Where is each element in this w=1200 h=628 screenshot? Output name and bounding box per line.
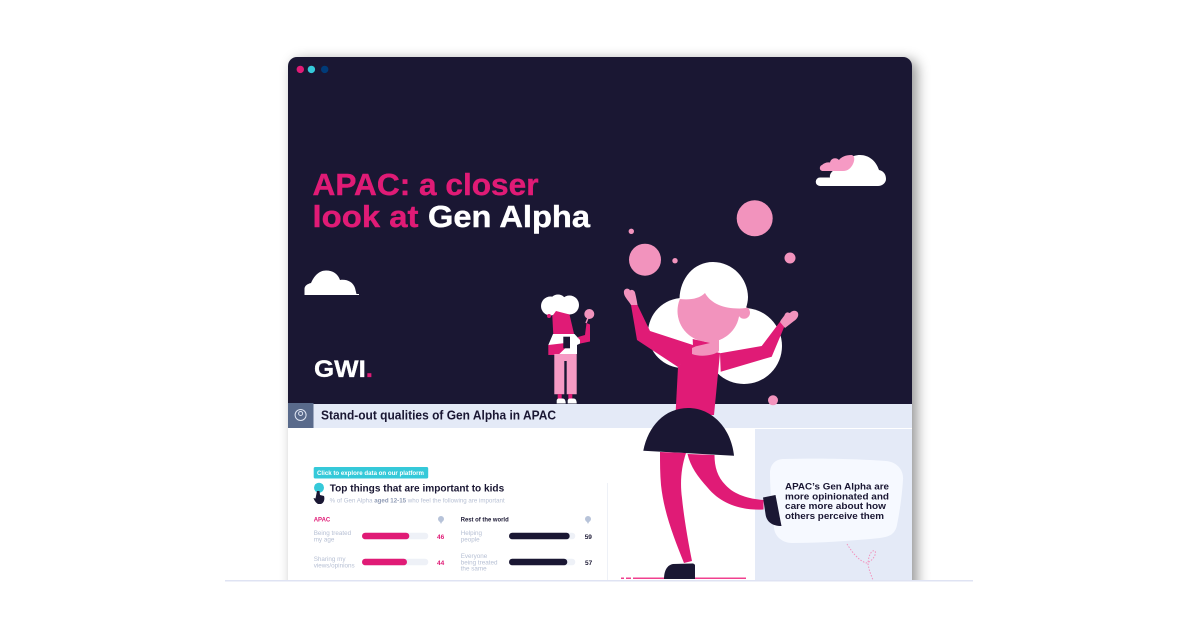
- left hand: [624, 289, 638, 305]
- APAC column: [314, 516, 445, 569]
- child socks and shoes: [557, 394, 577, 404]
- main girl figure: [624, 262, 798, 579]
- child shirt: [548, 334, 580, 354]
- bar: sharing my views 44: [314, 556, 445, 569]
- bar: being treated my age 46: [314, 530, 445, 544]
- hair lobes: [648, 298, 782, 384]
- bar: being treated my age 46: 46: [437, 534, 445, 541]
- bar: everyone being treated the same 57: Everyone: [461, 553, 488, 560]
- APAC column: APAC: [314, 518, 331, 524]
- platform button: [314, 467, 428, 478]
- right arm: [720, 322, 785, 372]
- head and ear: [678, 280, 750, 342]
- child phone: [563, 337, 570, 348]
- cloud: left: [304, 270, 359, 295]
- right callout panel: [755, 429, 912, 580]
- callout bubble: others perceive them: [785, 511, 884, 521]
- section header band: Stand-out qualities of Gen Alpha in APAC: [321, 408, 556, 422]
- floor line: [621, 578, 746, 579]
- dotted string: [847, 544, 875, 580]
- logo: GWI: GWI.: [314, 356, 373, 383]
- title: look at: [312, 200, 418, 234]
- window control dots: [297, 66, 328, 73]
- hair top: [680, 262, 748, 308]
- bar: everyone being treated the same 57: 57: [585, 560, 593, 567]
- callout bubble: care more about how: [785, 501, 887, 511]
- rest of the world column: [461, 516, 593, 573]
- bar: sharing my views 44: 44: [437, 560, 445, 567]
- child ear: [547, 314, 551, 318]
- cloud: top right: [816, 155, 886, 186]
- bar: everyone being treated the same 57: being treated: [461, 559, 498, 566]
- title: APAC: a closer: [312, 168, 539, 202]
- chart subheading: % of Gen Alpha aged 12-15 who feel the following are important: [330, 498, 505, 504]
- platform button: Click to explore data on our platform: [317, 471, 424, 477]
- bar: helping people 59: Helping: [461, 530, 483, 537]
- child forearm: [548, 343, 567, 355]
- white content panel: [288, 428, 912, 580]
- callout bubble: more opinionated and: [785, 491, 889, 501]
- bottom baseline: [225, 580, 973, 582]
- child raised arm: [578, 323, 590, 344]
- bar: helping people 59: 59: [585, 534, 592, 541]
- skirt: [643, 408, 734, 456]
- bar: everyone being treated the same 57: [460, 554, 592, 570]
- bar: sharing my views 44: Sharing my: [314, 556, 346, 563]
- juggling circles: [629, 200, 796, 405]
- child trousers: [554, 354, 577, 394]
- torso: [676, 347, 720, 415]
- callout bubble: [770, 459, 903, 543]
- neck: [692, 336, 719, 356]
- child head: [552, 311, 574, 335]
- rest of the world column: Rest of the world: [461, 518, 509, 524]
- infographic canvas: [225, 66, 973, 582]
- bar: sharing my views 44: views/opinions: [314, 562, 355, 569]
- chart heading: Top things that are important to kids: [330, 482, 504, 494]
- child hair: [541, 294, 579, 316]
- icon: pointing hand: [314, 483, 324, 504]
- bar: helping people 59: people: [461, 536, 480, 544]
- section header band: [288, 403, 912, 428]
- small child figure: [541, 294, 594, 404]
- callout bubble: APAC’s Gen Alpha are: [785, 482, 889, 492]
- right hand: [780, 311, 798, 328]
- standing shoe: [664, 564, 695, 579]
- collar: [693, 339, 710, 347]
- left arm: [631, 305, 696, 367]
- bar: being treated my age 46: Being treated: [314, 530, 352, 537]
- title: [312, 168, 591, 234]
- standing leg: [660, 452, 692, 563]
- bar: helping people 59: [461, 530, 592, 544]
- bar: everyone being treated the same 57: the same: [461, 566, 487, 573]
- kicking shoe: [763, 495, 782, 526]
- title: Gen Alpha: [428, 200, 591, 234]
- chart panel: top things important to kids: [314, 467, 608, 580]
- kicking leg: [688, 454, 764, 510]
- child lollipop: [584, 309, 594, 323]
- bar: being treated my age 46: my age: [314, 536, 335, 544]
